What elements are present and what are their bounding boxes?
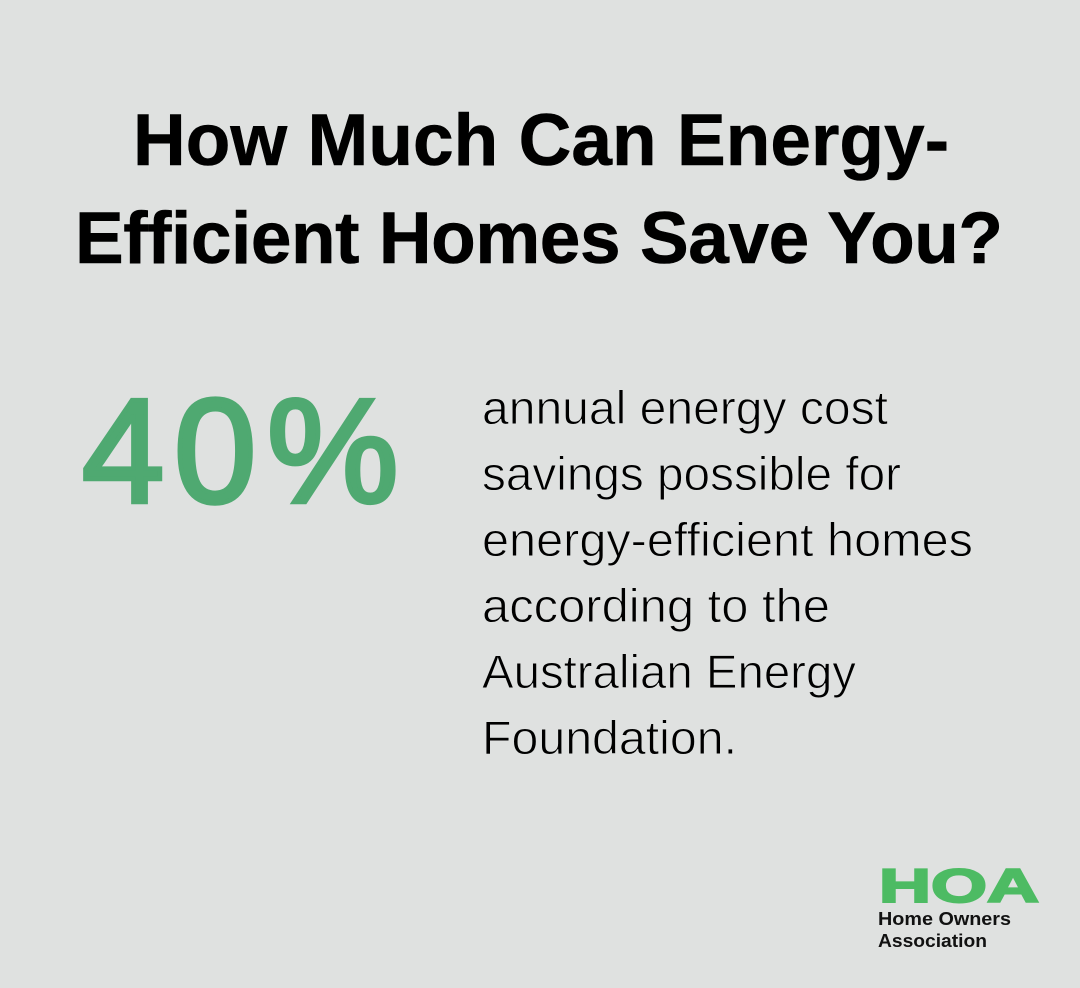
description text: according to the bbox=[482, 579, 830, 632]
logo: Home Owners Association bbox=[878, 859, 1039, 951]
title: How Much Can Energy- bbox=[133, 100, 949, 181]
title: Efficient Homes Save You? bbox=[75, 198, 1003, 279]
statistic: 40%: 40% bbox=[82, 369, 399, 534]
description text: energy-efficient homes bbox=[482, 513, 973, 566]
description text: Foundation. bbox=[482, 711, 737, 764]
description text: annual energy cost bbox=[482, 381, 888, 434]
logo name: Association bbox=[878, 931, 987, 951]
description text: savings possible for bbox=[482, 447, 901, 500]
logo name: Home Owners bbox=[878, 909, 1011, 929]
logo name bbox=[878, 909, 1011, 951]
title bbox=[75, 100, 1003, 279]
description text bbox=[482, 381, 973, 764]
logo mark: HOA: HOA bbox=[879, 859, 1039, 912]
description text: Australian Energy bbox=[482, 645, 856, 698]
